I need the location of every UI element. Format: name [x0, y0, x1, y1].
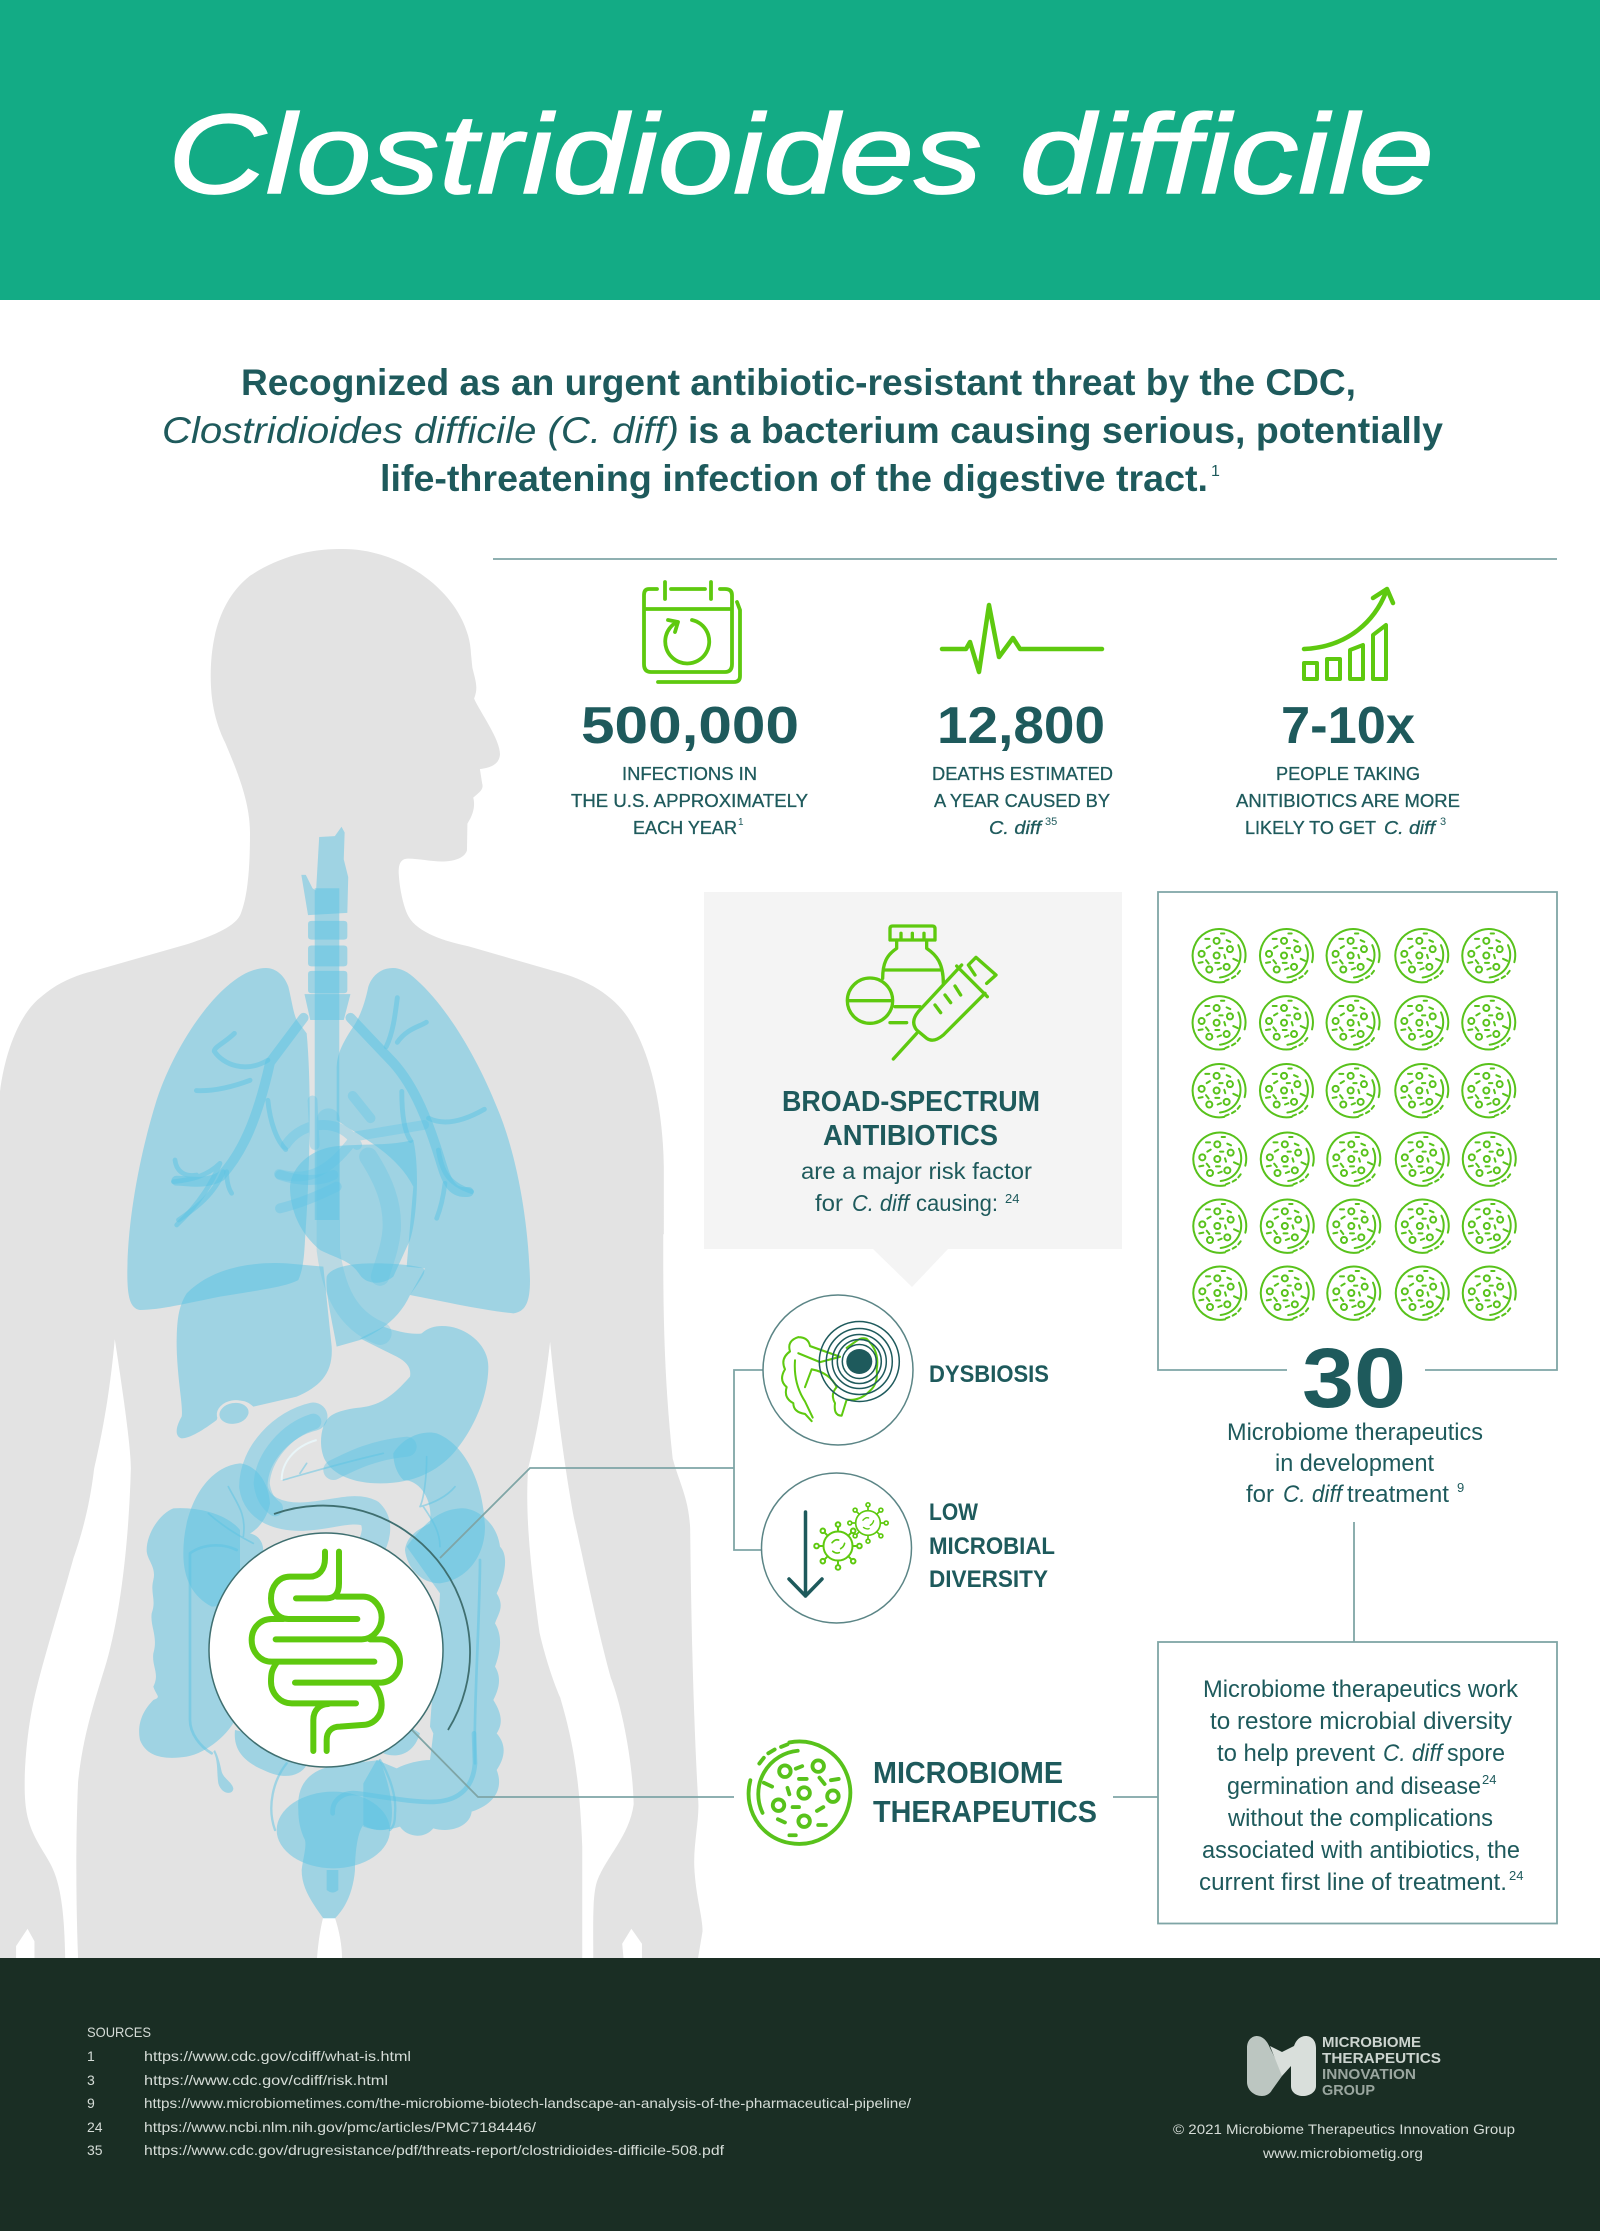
- panel: how therapeutics work: current first line of treatment.: [1199, 1869, 1507, 1896]
- stat: antibiotics risk: 7-10x: [1281, 697, 1415, 755]
- low microbial diversity: [762, 1473, 1055, 1623]
- heart: [290, 1140, 417, 1283]
- sources list: https://www.cdc.gov/drugresistance/pdf/threats-report/clostridioides-difficile-508.pdf: [144, 2142, 724, 2158]
- stat: antibiotics risk: [1236, 589, 1460, 838]
- panel: how therapeutics work: to help prevent: [1217, 1740, 1375, 1767]
- panel: 30 therapeutics grid: 9: [1457, 1480, 1464, 1495]
- intro text block: 1: [1211, 463, 1220, 480]
- panel: broad-spectrum antibiotics: for: [815, 1190, 843, 1216]
- panel: 30 therapeutics grid: for: [1246, 1481, 1274, 1508]
- low microbial diversity: DIVERSITY: [929, 1566, 1048, 1593]
- sources list: SOURCES: [87, 2024, 151, 2040]
- panel: 30 therapeutics grid: Microbiome therapeutics: [1227, 1419, 1483, 1446]
- stomach: [321, 1326, 488, 1483]
- left liver lobe: [326, 1263, 424, 1347]
- panel: 30 therapeutics grid: [1158, 892, 1557, 1508]
- stat: infections: INFECTIONS IN: [622, 763, 757, 784]
- sources list: https://www.cdc.gov/cdiff/risk.html: [144, 2072, 388, 2088]
- intro text block: Recognized as an urgent antibiotic-resistant threat by the CDC,: [241, 362, 1356, 403]
- sources list: 1: [87, 2048, 95, 2064]
- small intestine lower: [235, 1730, 307, 1776]
- petri dish grid: [1193, 929, 1516, 1320]
- icon: calendar: [644, 582, 740, 682]
- sources list: 9: [87, 2095, 95, 2111]
- stat: infections: 1: [738, 817, 744, 828]
- header banner: [0, 0, 1600, 300]
- microbiome therapeutics: THERAPEUTICS: [873, 1794, 1097, 1829]
- panel: broad-spectrum antibiotics: [704, 892, 1122, 1287]
- icon: large petri dish: [747, 1741, 851, 1845]
- connector between panels: [1353, 1522, 1355, 1642]
- stat: antibiotics risk: 3: [1440, 816, 1446, 828]
- stat: deaths: DEATHS ESTIMATED: [932, 763, 1113, 784]
- copyright: [1173, 2121, 1515, 2161]
- sources list: [87, 2024, 911, 2158]
- panel: 30 therapeutics grid: C. diff: [1283, 1481, 1344, 1508]
- panel: broad-spectrum antibiotics: ANTIBIOTICS: [823, 1120, 998, 1152]
- stat: antibiotics risk: PEOPLE TAKING: [1276, 763, 1420, 784]
- right lung: [337, 968, 530, 1313]
- panel: how therapeutics work: without the complications: [1227, 1805, 1493, 1832]
- body silhouette: [0, 549, 703, 1959]
- panel: how therapeutics work: C. diff: [1383, 1740, 1444, 1767]
- stat: antibiotics risk: ANITIBIOTICS ARE MORE: [1236, 790, 1460, 811]
- dysbiosis: [763, 1295, 1049, 1445]
- footer: [0, 1958, 1600, 2231]
- duodenum: [253, 1417, 376, 1553]
- rectum: [298, 1760, 392, 1918]
- icon: bottle, pill and syringe: [847, 926, 996, 1059]
- bladder: [277, 1792, 390, 1868]
- logo: GROUP: [1322, 2082, 1375, 2099]
- intro text block: Clostridioides difficile (C. diff): [162, 410, 679, 451]
- sources list: 3: [87, 2072, 95, 2088]
- ascending colon blob: [183, 1463, 270, 1607]
- logo: [1247, 2034, 1441, 2099]
- gallbladder: [216, 1399, 252, 1428]
- liver: [177, 1263, 332, 1438]
- rule above stats: [493, 558, 1557, 560]
- stat: infections: THE U.S. APPROXIMATELY: [571, 790, 808, 811]
- copyright: www.microbiometig.org: [1262, 2145, 1423, 2161]
- panel: how therapeutics work: 24: [1482, 1772, 1496, 1787]
- panel: broad-spectrum antibiotics: are a major risk factor: [801, 1158, 1032, 1184]
- copyright: © 2021 Microbiome Therapeutics Innovation Group: [1173, 2121, 1515, 2137]
- stat: infections: [571, 582, 808, 838]
- intro text block: life-threatening infection of the digestive tract.: [380, 458, 1208, 499]
- icon: heartbeat: [942, 605, 1102, 672]
- panel: 30 therapeutics grid: in development: [1275, 1450, 1434, 1477]
- low microbial diversity: LOW: [929, 1499, 978, 1526]
- logo: INNOVATION: [1322, 2066, 1416, 2083]
- icon: rising bar chart: [1304, 589, 1393, 679]
- sources list: 24: [87, 2119, 103, 2135]
- intro text block: is a bacterium causing serious, potentially: [688, 410, 1443, 451]
- intro text block: [162, 362, 1443, 499]
- panel: 30 therapeutics grid: 30: [1302, 1331, 1406, 1425]
- low microbial diversity: MICROBIAL: [929, 1533, 1055, 1560]
- stat: infections: 500,000: [581, 697, 799, 755]
- sources list: https://www.cdc.gov/cdiff/what-is.html: [144, 2048, 411, 2064]
- stat: deaths: 35: [1045, 816, 1057, 828]
- leader lines from intestine: [274, 1468, 734, 1797]
- panel: broad-spectrum antibiotics: C. diff: [852, 1190, 911, 1216]
- panel: how therapeutics work: [1158, 1642, 1557, 1924]
- panel: how therapeutics work: spore: [1447, 1740, 1505, 1767]
- title: Clostridioides difficile: [168, 91, 1434, 217]
- panel: 30 therapeutics grid: treatment: [1347, 1481, 1449, 1508]
- dysbiosis: DYSBIOSIS: [929, 1361, 1049, 1388]
- stat: deaths: A YEAR CAUSED BY: [934, 790, 1110, 811]
- organs: intestines: [139, 1417, 505, 1918]
- appendix: [213, 1750, 233, 1793]
- panel: broad-spectrum antibiotics: 24: [1005, 1191, 1019, 1206]
- colon right side and base: [363, 1508, 505, 1836]
- logo: MICROBIOME: [1322, 2034, 1421, 2051]
- bracket connector: [734, 1370, 763, 1550]
- stat: antibiotics risk: C. diff: [1384, 817, 1437, 838]
- panel: how therapeutics work: associated with antibiotics, the: [1202, 1837, 1520, 1864]
- microbiome therapeutics: MICROBIOME: [873, 1755, 1063, 1790]
- panel: broad-spectrum antibiotics: causing:: [916, 1190, 998, 1216]
- panel: how therapeutics work: 24: [1509, 1868, 1523, 1883]
- panel: broad-spectrum antibiotics: BROAD-SPECTRUM: [782, 1086, 1040, 1118]
- sources list: 35: [87, 2142, 103, 2158]
- connector to explanation box: [1113, 1796, 1158, 1798]
- panel: how therapeutics work: Microbiome therapeutics work: [1203, 1676, 1519, 1703]
- intestine circle icon: [209, 1533, 443, 1767]
- stat: deaths: C. diff: [989, 817, 1043, 838]
- left lung: [127, 968, 310, 1310]
- descending arc: [393, 1432, 485, 1583]
- trachea and larynx: [176, 827, 484, 1220]
- icon: arrow and bacteria: [762, 1473, 912, 1623]
- stat: deaths: 12,800: [937, 697, 1105, 755]
- sources list: https://www.ncbi.nlm.nih.gov/pmc/articles/PMC7184446/: [144, 2119, 536, 2135]
- organs: lungs, heart, airway: [127, 827, 530, 1483]
- stat: deaths: [932, 605, 1113, 838]
- panel: how therapeutics work: to restore microbial diversity: [1210, 1708, 1512, 1735]
- colon left side: [139, 1508, 240, 1758]
- sources list: https://www.microbiometimes.com/the-microbiome-biotech-landscape-an-analysis-of-the-pharmaceutical-pipeline/: [144, 2095, 911, 2111]
- pancreas: [333, 1447, 407, 1470]
- microbiome therapeutics: [747, 1741, 1097, 1845]
- logo: THERAPEUTICS: [1322, 2050, 1441, 2067]
- icon: colon with target: [763, 1295, 913, 1445]
- panel: how therapeutics work: germination and disease: [1227, 1773, 1481, 1800]
- stat: antibiotics risk: LIKELY TO GET: [1245, 817, 1376, 838]
- stat: infections: EACH YEAR: [633, 817, 737, 838]
